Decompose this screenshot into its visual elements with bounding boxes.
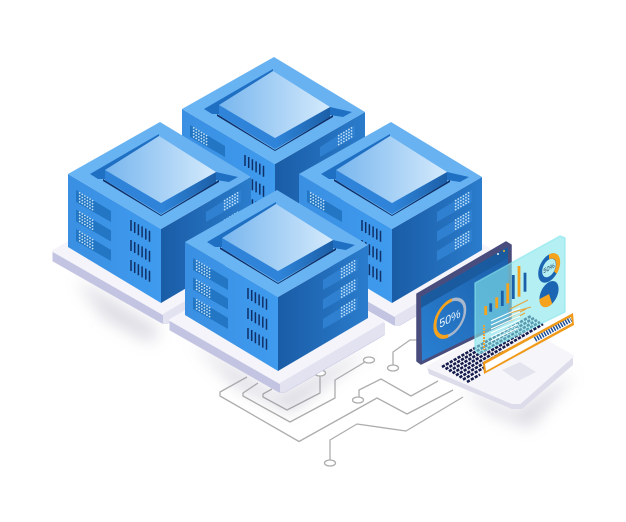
pie chart [539, 277, 559, 311]
gauge 50% [435, 293, 465, 343]
platform: front server base [170, 258, 384, 392]
search bar [483, 313, 574, 374]
soft shadows under platforms [75, 278, 575, 428]
donut 50%: 50% [543, 262, 555, 276]
platform: left server base [53, 189, 267, 323]
circuit terminal rings [314, 357, 398, 466]
laptop [417, 236, 574, 409]
server: right [299, 122, 482, 303]
server: front [185, 190, 368, 371]
platform: right server base [285, 191, 499, 325]
data lines [484, 300, 531, 350]
server: left [68, 122, 251, 303]
circuit traces [220, 340, 463, 461]
laptop screen [417, 242, 511, 364]
keyboard [442, 316, 543, 382]
gauge 50%: 50% [439, 306, 461, 331]
laptop base [427, 320, 573, 409]
server: back [182, 57, 365, 238]
bar chart [486, 266, 525, 315]
holographic chart panel [475, 236, 565, 354]
